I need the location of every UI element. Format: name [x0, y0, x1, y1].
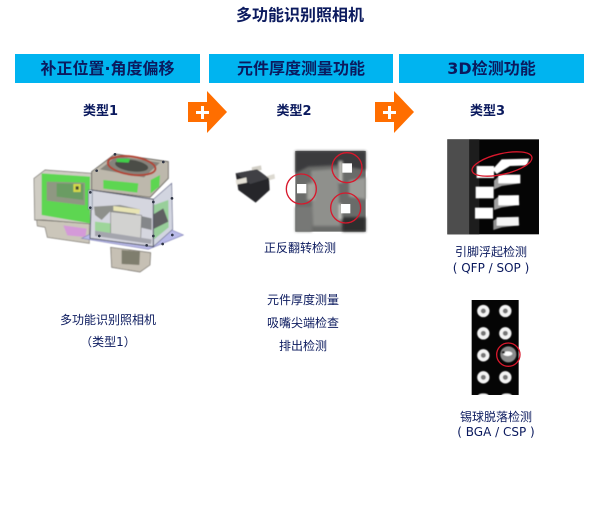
label: type 2: 类型2 — [276, 103, 312, 119]
caption: lead lift inspection — [453, 244, 529, 275]
caption: lead lift inspection: 引脚浮起检测 — [455, 244, 527, 259]
top box — [92, 154, 168, 197]
list: type 2 functions: 元件厚度测量 — [267, 292, 339, 307]
caption: solder ball inspection: ( BGA / CSP ) — [457, 425, 535, 439]
left lower housing — [37, 220, 89, 243]
arrow: plus 2 — [375, 91, 414, 133]
caption: type 1 camera: 多功能识别照相机 — [60, 313, 156, 327]
label: type 3: 类型3 — [470, 103, 505, 119]
front box — [90, 190, 153, 247]
bottom housing — [111, 247, 151, 272]
caption: solder ball inspection — [457, 409, 535, 439]
red mark — [497, 343, 520, 366]
list: type 2 functions: 吸嘴尖端检查 — [267, 315, 339, 330]
caption: solder ball inspection: 锡球脱落检测 — [460, 409, 532, 424]
header: position correction: 补正位置·角度偏移 — [40, 59, 175, 78]
header: thickness measurement: 元件厚度测量功能 — [237, 59, 365, 78]
list: type 2 functions — [267, 292, 339, 353]
base plate — [82, 230, 183, 249]
red marks — [286, 153, 362, 223]
red mark — [470, 147, 534, 181]
photo: flip inspection — [286, 151, 366, 232]
list: type 2 functions: 排出检测 — [279, 338, 327, 353]
caption: lead lift inspection: ( QFP / SOP ) — [453, 261, 529, 275]
bolts — [89, 153, 174, 247]
caption: flip inspection: 正反翻转检测 — [264, 240, 336, 255]
arrow: plus 1 — [188, 91, 227, 133]
caption: type 1 camera — [60, 313, 156, 349]
header: position correction — [15, 54, 200, 83]
caption: type 1 camera: （类型1） — [80, 335, 136, 349]
label: type 1: 类型1 — [83, 103, 118, 119]
photo: solder ball inspection — [472, 300, 520, 398]
right face — [153, 183, 173, 247]
header: 3D inspection — [399, 54, 584, 83]
photo: lead lift inspection — [447, 139, 539, 234]
title: 多功能识别照相机 — [236, 6, 364, 24]
icon: component chip — [236, 165, 275, 203]
left box — [34, 170, 92, 224]
illustration: multifunction camera — [34, 153, 183, 272]
header: thickness measurement — [209, 54, 393, 83]
header: 3D inspection: 3D检测功能 — [447, 59, 536, 78]
